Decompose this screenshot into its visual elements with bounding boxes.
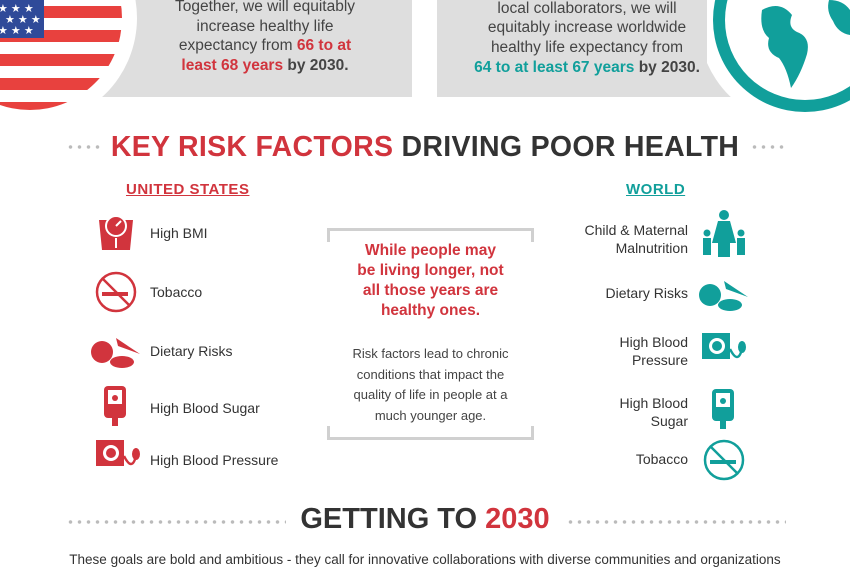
- text: world goal: local collaborators, we will: [497, 0, 677, 17]
- text: callout heading: [357, 242, 504, 319]
- icon: no smoking: [96, 272, 136, 312]
- text: callout body: [352, 346, 509, 422]
- icon: glucose meter: [104, 386, 126, 426]
- label: Child & Maternal Malnutrition: Child & Maternal: [584, 222, 688, 238]
- label: Child & Maternal Malnutrition: Malnutrition: [616, 240, 688, 256]
- label: Tobacco: Tobacco: [150, 284, 202, 300]
- panel: center callout: [327, 228, 534, 440]
- title: Getting to 2030: GETTING TO 2030: [300, 503, 550, 535]
- text: US goal: least 68 years by 2030.: [181, 57, 349, 74]
- icon: globe: [707, 0, 850, 112]
- label: Dietary Risks: Dietary Risks: [150, 343, 232, 359]
- label: High Blood Pressure: Pressure: [632, 352, 688, 368]
- text: world goal: [474, 0, 700, 76]
- icon: family: [703, 210, 745, 257]
- panel: US goal: [0, 0, 412, 110]
- text: world goal: healthy life expectancy from: [491, 39, 683, 56]
- title: key risk factors: KEY RISK FACTORS DRIVING POOR HEALTH: [111, 131, 739, 163]
- icon: US flag: [0, 0, 137, 110]
- text: callout heading: be living longer, not: [357, 262, 504, 279]
- icon: glucose meter: [712, 389, 734, 429]
- icon: US flag: ★ ★ ★: [5, 14, 41, 26]
- heading: World: WORLD: [626, 181, 685, 198]
- icon: food: [699, 281, 748, 311]
- icon: blood pressure: [702, 333, 746, 359]
- label: High BMI: High BMI: [150, 225, 208, 241]
- text: US goal: expectancy from 66 to at: [179, 37, 351, 54]
- label: Dietary Risks: Dietary Risks: [606, 285, 688, 301]
- icon: scale: [99, 217, 133, 250]
- panel: US risk factors: [91, 217, 278, 468]
- icon: blood pressure: [96, 440, 140, 466]
- icon: no smoking: [704, 440, 744, 480]
- heading: United States: UNITED STATES: [126, 181, 249, 198]
- text: callout heading: all those years are: [363, 282, 498, 299]
- text: US goal: increase healthy life: [196, 18, 334, 35]
- label: High Blood Sugar: High Blood Sugar: [150, 400, 260, 416]
- text: callout heading: healthy ones.: [381, 302, 480, 319]
- label: High Blood Sugar: [620, 395, 688, 429]
- label: Tobacco: Tobacco: [636, 451, 688, 467]
- panel: world goal: [437, 0, 850, 112]
- label: High Blood Pressure: High Blood: [620, 334, 688, 350]
- panel: world risk factors: [584, 210, 748, 480]
- text: bottom paragraph: These goals are bold and ambitious - they call for innovative collaborations with diverse communities and organizations: [69, 552, 781, 567]
- label: High Blood Sugar: Sugar: [651, 413, 688, 429]
- label: High Blood Pressure: High Blood Pressure: [150, 452, 278, 468]
- icon: food: [91, 338, 140, 368]
- label: Child & Maternal Malnutrition: [584, 222, 688, 256]
- text: world goal: equitably increase worldwide: [488, 19, 686, 36]
- text: callout body: much younger age.: [375, 408, 486, 422]
- text: world goal: 64 to at least 67 years by 2030.: [474, 59, 700, 76]
- label: High Blood Sugar: High Blood: [620, 395, 688, 411]
- text: callout body: conditions that impact the: [357, 366, 504, 382]
- label: High Blood Pressure: [620, 334, 688, 368]
- text: callout body: quality of life in people at a: [354, 387, 507, 402]
- text: US goal: [175, 0, 355, 74]
- text: callout heading: While people may: [365, 242, 496, 259]
- text: callout body: Risk factors lead to chronic: [352, 346, 509, 361]
